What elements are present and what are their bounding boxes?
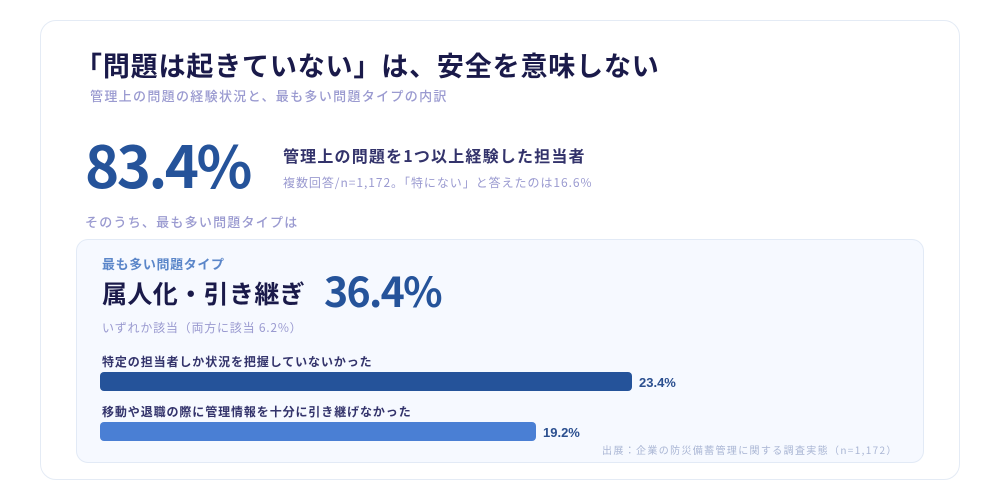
bar row 2 xyxy=(100,403,580,441)
section lead-in: そのうち、最も多い問題タイプは xyxy=(85,212,298,231)
big stat: 83.4%: 83.4% xyxy=(85,121,250,205)
title: 「問題は起きていない」は、安全を意味しない xyxy=(75,45,660,84)
source note: 出展：企業の防災備蓄管理に関する調査実態（n=1,172） xyxy=(602,442,898,457)
bar row 1 xyxy=(100,353,676,391)
panel stat: 36.4%: 36.4% xyxy=(324,259,441,319)
stat description xyxy=(283,143,593,191)
bar 1 xyxy=(100,372,632,391)
stat heading: 管理上の問題を1つ以上経験した担当者 xyxy=(283,143,586,167)
bar value 1: 23.4% xyxy=(639,375,676,390)
panel note: いずれか該当（両方に該当 6.2%） xyxy=(102,319,302,336)
panel: top problem type xyxy=(76,239,924,463)
bar value 2: 19.2% xyxy=(543,425,580,440)
bar label 1: 特定の担当者しか状況を把握していないかった xyxy=(102,353,373,370)
bar 2 xyxy=(100,422,536,441)
panel label: 最も多い問題タイプ xyxy=(102,254,225,273)
subtitle: 管理上の問題の経験状況と、最も多い問題タイプの内訳 xyxy=(90,86,448,105)
stat note: 複数回答/n=1,172。「特にない」と答えたのは16.6% xyxy=(283,174,593,191)
panel heading: 属人化・引き継ぎ xyxy=(102,275,305,311)
bar label 2: 移動や退職の際に管理情報を十分に引き継げなかった xyxy=(102,403,412,420)
